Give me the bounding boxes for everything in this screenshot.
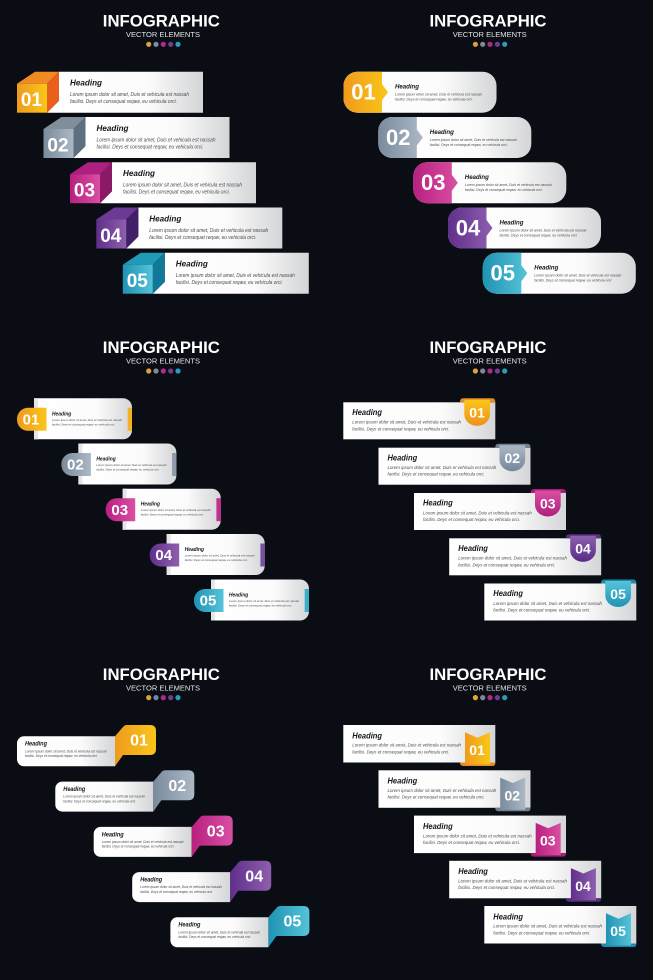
step 05: 05 xyxy=(127,271,148,292)
tab card 01 xyxy=(17,398,132,439)
ribbon card 04: 04 xyxy=(575,878,591,894)
speech card 05: facilisi. Deys et consequat reqaw, eu vehicula orci. xyxy=(178,935,251,939)
pill 05: facilisi. Deys et consequat reqaw, eu vehicula orci. xyxy=(534,279,612,283)
pill 04: facilisi. Deys et consequat reqaw, eu vehicula orci. xyxy=(500,234,578,238)
title block xyxy=(430,665,546,700)
pill 01: 01 xyxy=(351,80,376,105)
speech card 01: facilisi. Deys et consequat reqaw, eu vehicula orci. xyxy=(25,754,98,758)
ribbon card 05 xyxy=(484,906,636,947)
title block: VECTOR ELEMENTS xyxy=(453,683,527,692)
speech card 03 xyxy=(94,816,233,857)
badge card 02: Heading xyxy=(388,453,417,462)
step 05: facilisi. Deys et consequat reqaw, eu vehicula orci. xyxy=(176,280,283,286)
speech card 01: Heading xyxy=(25,742,47,748)
speech card 04: Lorem ipsum dolor sit amet, Duis et vehicula est nassah xyxy=(140,885,222,889)
step 02: 02 xyxy=(47,136,69,156)
badge card 04: Lorem ipsum dolor sit amet, Duis et vehicula est nassah xyxy=(458,556,567,561)
badge card 02: 02 xyxy=(505,450,520,466)
ribbon card 04: facilisi. Deys et consequat reqaw, eu vehicula orci. xyxy=(458,885,555,890)
step 03: Lorem ipsum dolor sit amet, Duis et vehicula est nassah xyxy=(123,183,242,189)
title block: VECTOR ELEMENTS xyxy=(453,357,527,366)
pill 05: Lorem ipsum dolor sit amet, Duis et vehicula est nassah xyxy=(534,274,621,278)
speech card 02 xyxy=(55,770,194,812)
ribbon card 04: Heading xyxy=(458,867,488,876)
title block: VECTOR ELEMENTS xyxy=(126,357,200,366)
pill 01: facilisi. Deys et consequat reqaw, eu vehicula orci. xyxy=(395,98,473,102)
pill 02: Heading xyxy=(430,129,454,136)
step 05 xyxy=(123,253,309,294)
badge card 01 xyxy=(343,398,495,439)
step 02: facilisi. Deys et consequat reqaw, eu vehicula orci. xyxy=(96,144,204,150)
pill 04: Lorem ipsum dolor sit amet, Duis et vehicula est nassah xyxy=(500,228,586,232)
pill 02 xyxy=(378,117,531,158)
badge card 04: Heading xyxy=(458,544,488,553)
badge card 01: Lorem ipsum dolor sit amet, Duis et vehicula est nassah xyxy=(352,420,461,425)
pill 05: 05 xyxy=(491,261,515,286)
step 03 xyxy=(70,162,256,203)
step 05: Lorem ipsum dolor sit amet, Duis et vehicula est nassah xyxy=(176,273,295,279)
step 05: Heading xyxy=(176,259,209,269)
ribbon card 02: 02 xyxy=(505,787,520,803)
badge card 02: facilisi. Deys et consequat reqaw, eu vehicula orci. xyxy=(388,472,484,477)
pill 01: Lorem ipsum dolor sit amet, Duis et vehicula est nassah xyxy=(395,93,482,97)
tab card 04 xyxy=(150,534,265,575)
badge card 03: Lorem ipsum dolor sit amet, Duis et vehicula est nassah xyxy=(423,510,532,515)
tab card 01: Heading xyxy=(52,411,72,417)
badge card 03: Heading xyxy=(423,499,453,508)
ribbon card 03 xyxy=(414,816,566,857)
speech card 02: Lorem ipsum dolor sit amet, Duis et vehicula est nassah xyxy=(63,795,145,799)
tab card 04: facilisi. Deys et consequat reqaw, eu vehicula orci. xyxy=(185,558,248,562)
tab card 03 xyxy=(106,489,221,530)
tab card 05: Lorem ipsum dolor sit amet, Duis et vehicula est nassah xyxy=(229,599,299,603)
title block: INFOGRAPHIC xyxy=(430,12,547,30)
step 03: facilisi. Deys et consequat reqaw, eu vehicula orci. xyxy=(123,190,230,196)
panel: rounded pills with arrow xyxy=(344,12,636,294)
ribbon card 03: Lorem ipsum dolor sit amet, Duis et vehicula est nassah xyxy=(423,833,532,838)
badge card 05 xyxy=(484,580,636,620)
tab card 05: Heading xyxy=(229,592,249,598)
tab card 03: 03 xyxy=(111,502,128,519)
ribbon card 04: Lorem ipsum dolor sit amet, Duis et vehicula est nassah xyxy=(458,878,567,883)
speech card 05 xyxy=(170,906,309,947)
ribbon card 03: 03 xyxy=(540,833,556,849)
badge card 03 xyxy=(414,489,566,530)
title block: VECTOR ELEMENTS xyxy=(126,30,200,39)
ribbon card 05: Lorem ipsum dolor sit amet, Duis et vehicula est nassah xyxy=(493,924,602,929)
title block: INFOGRAPHIC xyxy=(430,665,547,684)
tab card 05 xyxy=(194,580,309,620)
pill 03: 03 xyxy=(421,170,446,195)
tab card 03: facilisi. Deys et consequat reqaw, eu vehicula orci. xyxy=(141,513,204,517)
speech card 05: 05 xyxy=(284,914,301,931)
ribbon card 01: facilisi. Deys et consequat reqaw, eu vehicula orci. xyxy=(352,749,449,754)
ribbon card 01: Heading xyxy=(352,731,382,740)
ribbon card 05: 05 xyxy=(610,923,626,939)
badge card 04: facilisi. Deys et consequat reqaw, eu vehicula orci. xyxy=(458,562,555,567)
ribbon card 03: Heading xyxy=(423,822,453,831)
speech card 03: facilisi. Deys et consequat reqaw, eu vehicula orci. xyxy=(102,845,174,849)
pill 03: facilisi. Deys et consequat reqaw, eu vehicula orci. xyxy=(465,188,543,192)
title block: INFOGRAPHIC xyxy=(103,12,220,30)
ribbon card 04 xyxy=(449,861,601,902)
tab card 01: 01 xyxy=(23,411,39,428)
speech card 02: 02 xyxy=(168,778,186,795)
tab card 05: 05 xyxy=(200,593,216,610)
pill 02: 02 xyxy=(386,125,411,150)
speech card 03: Heading xyxy=(102,832,124,838)
title block: INFOGRAPHIC xyxy=(103,338,220,357)
tab card 02: Heading xyxy=(96,456,116,462)
ribbon card 01: 01 xyxy=(469,742,485,758)
pill 05 xyxy=(483,253,636,294)
tab card 03: Lorem ipsum dolor sit amet, Duis et vehicula est nassah xyxy=(141,508,211,512)
panel: cards with top badges xyxy=(343,338,636,620)
pill 03: Heading xyxy=(465,174,489,181)
speech card 01: 01 xyxy=(130,733,148,750)
step 03: 03 xyxy=(74,181,95,202)
pill 02: facilisi. Deys et consequat reqaw, eu vehicula orci. xyxy=(430,143,508,147)
tab card 02: facilisi. Deys et consequat reqaw, eu vehicula orci. xyxy=(96,468,160,472)
speech card 02: Heading xyxy=(63,787,86,793)
title block xyxy=(430,12,546,47)
speech card 05: Heading xyxy=(178,923,201,929)
tab card 01: facilisi. Deys et consequat reqaw, eu vehicula orci. xyxy=(52,422,115,426)
step 02: Heading xyxy=(96,123,129,133)
badge card 01: facilisi. Deys et consequat reqaw, eu vehicula orci. xyxy=(352,426,449,431)
speech card 05: Lorem ipsum dolor sit amet, Duis et vehicula est nassah xyxy=(178,930,260,934)
speech card 04: 04 xyxy=(245,868,263,885)
ribbon card 02: Lorem ipsum dolor sit amet, Duis et vehicula est nassah xyxy=(388,788,497,793)
title block: VECTOR ELEMENTS xyxy=(126,683,200,692)
tab card 04: Heading xyxy=(185,547,205,553)
tab card 02: 02 xyxy=(67,457,84,474)
pill 02: Lorem ipsum dolor sit amet, Duis et vehicula est nassah xyxy=(430,138,517,142)
speech card 02: facilisi. Deys et consequat reqaw, eu vehicula orci. xyxy=(63,799,136,803)
ribbon card 01 xyxy=(343,725,495,766)
tab card 01: Lorem ipsum dolor sit amet, Duis et vehicula est nassah xyxy=(52,418,122,422)
title block: INFOGRAPHIC xyxy=(430,338,547,357)
panel: cards with side tabs xyxy=(17,338,309,620)
step 04: facilisi. Deys et consequat reqaw, eu vehicula orci. xyxy=(149,235,256,241)
speech card 04: facilisi. Deys et consequat reqaw, eu vehicula orci. xyxy=(140,890,213,894)
step 03: Heading xyxy=(123,168,156,178)
panel: cards with notched ribbons xyxy=(343,665,636,947)
badge card 05: 05 xyxy=(610,586,626,602)
badge card 04 xyxy=(449,534,601,575)
tab card 02 xyxy=(61,444,176,484)
pill 04 xyxy=(448,208,601,248)
step 01: 01 xyxy=(21,90,42,111)
title block xyxy=(103,665,220,700)
step 04: 04 xyxy=(100,226,122,247)
speech card 04: Heading xyxy=(140,877,163,883)
title block: VECTOR ELEMENTS xyxy=(453,30,527,39)
step 01 xyxy=(17,72,203,113)
pill 03: Lorem ipsum dolor sit amet, Duis et vehicula est nassah xyxy=(465,183,552,187)
pill 01 xyxy=(344,72,496,113)
ribbon card 02 xyxy=(378,770,530,811)
step 02 xyxy=(44,117,230,158)
ribbon card 03: facilisi. Deys et consequat reqaw, eu vehicula orci. xyxy=(423,840,520,845)
badge card 03: 03 xyxy=(540,495,556,511)
step 01: facilisi. Deys et consequat reqaw, eu vehicula orci. xyxy=(70,99,177,105)
ribbon card 02: facilisi. Deys et consequat reqaw, eu vehicula orci. xyxy=(388,795,484,800)
badge card 03: facilisi. Deys et consequat reqaw, eu vehicula orci. xyxy=(423,517,520,522)
ribbon card 01: Lorem ipsum dolor sit amet, Duis et vehicula est nassah xyxy=(352,743,461,748)
title block: INFOGRAPHIC xyxy=(103,665,220,684)
step 04 xyxy=(96,208,282,248)
badge card 05: facilisi. Deys et consequat reqaw, eu vehicula orci. xyxy=(493,608,590,612)
speech card 03: 03 xyxy=(207,823,225,840)
pill 05: Heading xyxy=(534,265,558,272)
panel: speech-tab cards xyxy=(17,665,309,947)
tab card 02: Lorem ipsum dolor sit amet, Duis et vehicula est nassah xyxy=(96,463,167,467)
step 04: Heading xyxy=(149,214,182,224)
pill 01: Heading xyxy=(395,84,419,91)
speech card 04 xyxy=(132,861,271,902)
badge card 05: Lorem ipsum dolor sit amet, Duis et vehicula est nassah xyxy=(493,601,602,606)
title block xyxy=(103,12,220,47)
badge card 01: 01 xyxy=(469,405,485,421)
badge card 05: Heading xyxy=(493,589,523,598)
tab card 04: Lorem ipsum dolor sit amet, Duis et vehicula est nassah xyxy=(185,554,255,558)
title block xyxy=(103,338,220,374)
tab card 03: Heading xyxy=(141,502,161,508)
badge card 01: Heading xyxy=(352,408,382,417)
speech card 01: Lorem ipsum dolor sit amet, Duis et vehicula est nassah xyxy=(25,749,107,753)
speech card 03: Lorem ipsum dolor sit amet, Duis et vehicula est nassah xyxy=(102,840,183,844)
pill 04: 04 xyxy=(456,216,481,240)
badge card 02: Lorem ipsum dolor sit amet, Duis et vehicula est nassah xyxy=(388,465,497,470)
step 01: Lorem ipsum dolor sit amet, Duis et vehicula est nassah xyxy=(70,92,189,98)
ribbon card 05: Heading xyxy=(493,912,523,921)
panel: 3D cube steps xyxy=(17,12,309,294)
ribbon card 05: facilisi. Deys et consequat reqaw, eu vehicula orci. xyxy=(493,930,590,935)
badge card 04: 04 xyxy=(575,541,591,557)
ribbon card 02: Heading xyxy=(388,777,417,786)
pill 04: Heading xyxy=(500,220,524,226)
step 02: Lorem ipsum dolor sit amet, Duis et vehicula est nassah xyxy=(96,138,216,144)
tab card 05: facilisi. Deys et consequat reqaw, eu vehicula orci. xyxy=(229,604,292,608)
title block xyxy=(430,338,546,374)
pill 03 xyxy=(413,162,566,203)
step 04: Lorem ipsum dolor sit amet, Duis et vehicula est nassah xyxy=(149,228,269,234)
badge card 02 xyxy=(378,444,530,485)
tab card 04: 04 xyxy=(155,547,173,564)
speech card 01 xyxy=(17,725,156,766)
step 01: Heading xyxy=(70,78,103,88)
